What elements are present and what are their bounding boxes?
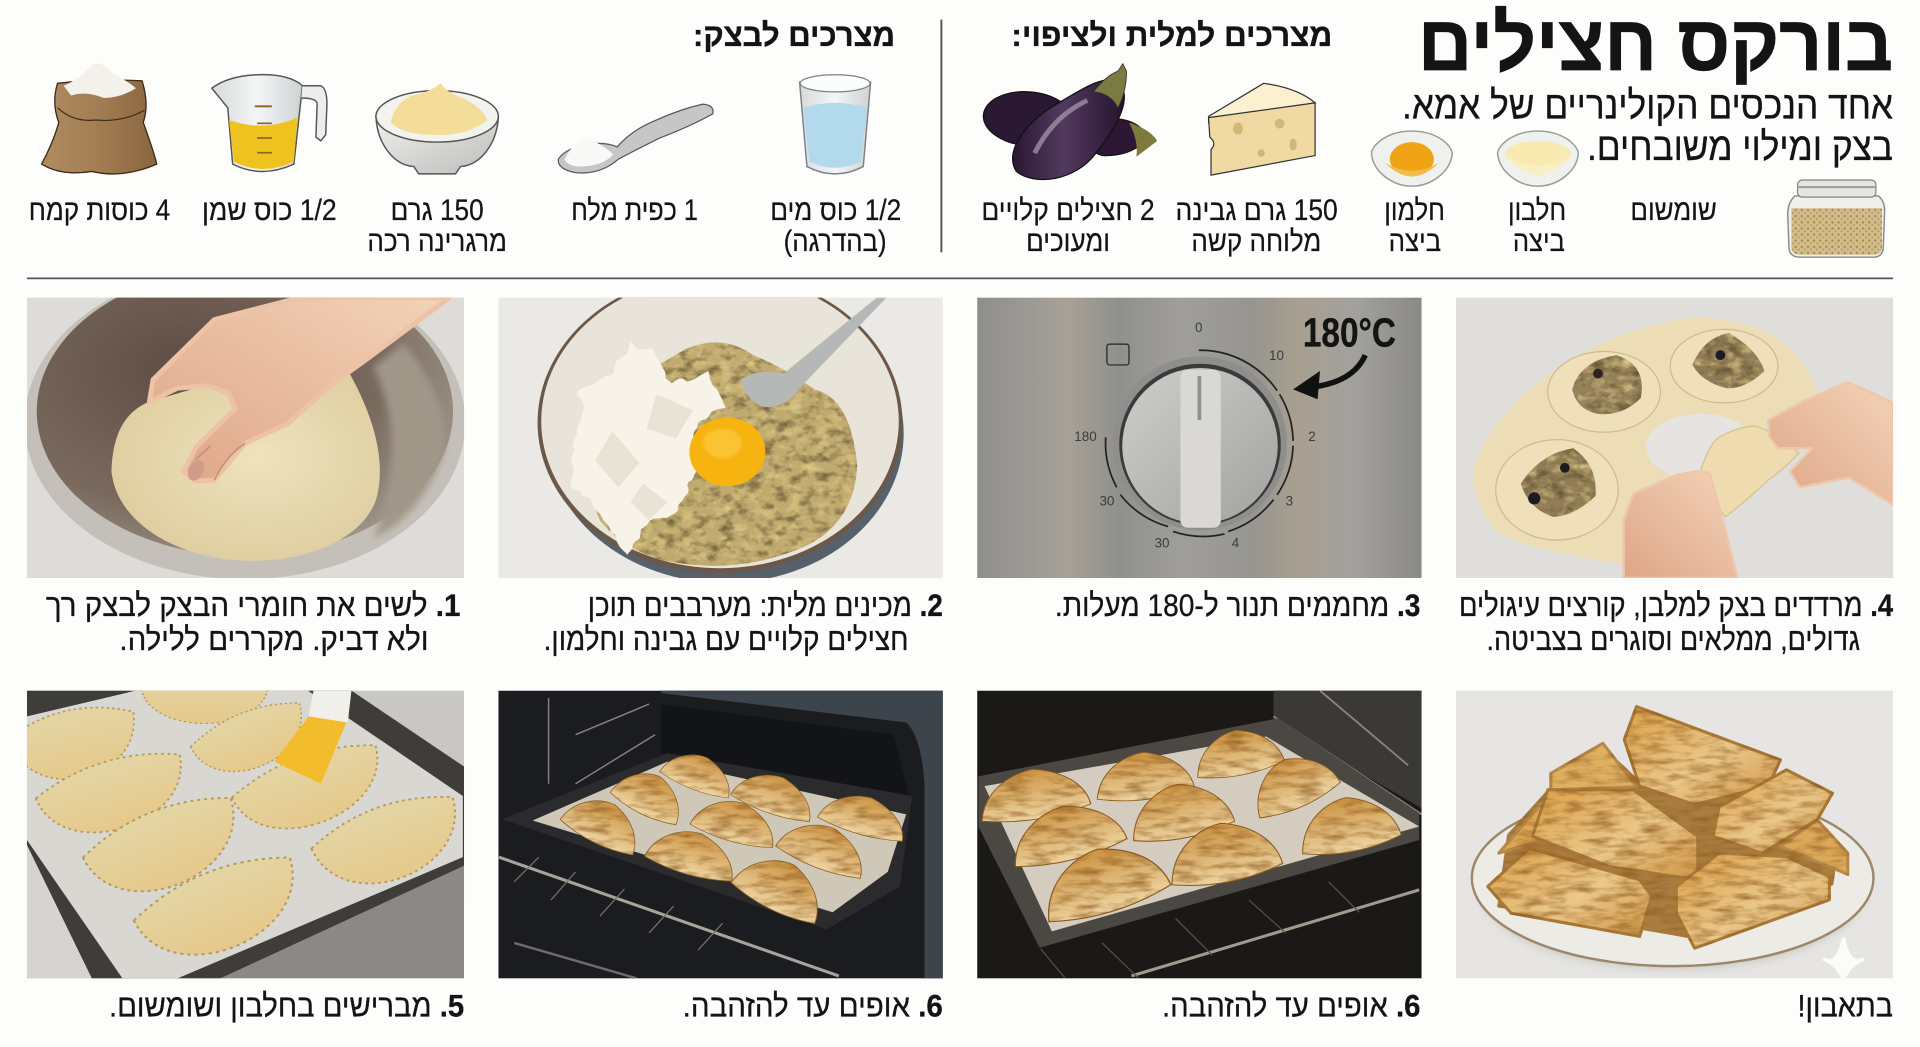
photo 6: baking in oven: [498, 691, 943, 978]
ingredient labels: חלמון: [1384, 194, 1445, 227]
ingredient labels: (בהדרגה): [784, 225, 887, 258]
closing caption: בתאבון!: [1798, 987, 1893, 1023]
caption 4: [1459, 587, 1893, 657]
ingredient labels: 150 גרם גבינה: [1176, 194, 1338, 227]
photo 5: brushing with egg white and sesame: [26, 690, 464, 978]
icon: egg yolk bowl: [1371, 131, 1452, 186]
ingredient labels: חלבון: [1508, 194, 1566, 227]
photo 7: golden borekas in oven: [975, 691, 1422, 978]
ingredient labels: 4 כוסות קמח: [29, 194, 170, 227]
icon: eggplants: [981, 64, 1157, 180]
icon: margarine bowl: [376, 83, 498, 174]
subtitle: [1402, 84, 1893, 169]
ingredient labels: מלוחה קשה: [1191, 225, 1321, 258]
ingredient labels: מרגרינה רכה: [367, 225, 507, 258]
ingredient labels: 2 חצילים קלויים: [981, 194, 1155, 227]
caption 1: [46, 587, 460, 657]
subtitle: בצק ומילוי משובחים.: [1587, 126, 1893, 169]
dial numbers: 4: [1232, 535, 1240, 550]
icon: sesame jar: [1788, 180, 1885, 257]
icon: water glass: [800, 75, 871, 174]
ingredient labels: ומעוכים: [1026, 225, 1110, 258]
dial numbers: 2: [1308, 429, 1316, 444]
photo 8: finished borekas on a plate: [1456, 691, 1893, 980]
photo 3: oven dial at 180°C: [977, 298, 1422, 578]
temperature label: 180°C: [1303, 310, 1396, 356]
caption 1: ולא דביק. מקררים ללילה.: [119, 621, 429, 657]
icon: measuring jug with oil: [212, 75, 327, 171]
dial numbers: 0: [1195, 320, 1203, 335]
dial numbers: 30: [1099, 494, 1114, 509]
oven dial: [1106, 350, 1293, 536]
title: בורקס חצילים: [1418, 0, 1893, 87]
caption 3: 3. מחממים תנור ל-180 מעלות.: [1055, 587, 1420, 623]
caption 4: גדולים, ממלאים וסוגרים בצביטה.: [1487, 621, 1860, 657]
heading: filling ingredients: מצרכים למלית ולציפוי:: [1011, 17, 1332, 53]
ingredient labels: ביצה: [1513, 225, 1565, 258]
caption 4: 4. מרדדים בצק למלבן, קורצים עיגולים: [1459, 587, 1893, 623]
dial numbers: 30: [1155, 535, 1170, 550]
ingredient labels: 1/2 כוס שמן: [202, 194, 337, 227]
caption 6 right: 6. אופים עד להזהבה.: [1162, 987, 1420, 1023]
caption 2: [544, 587, 943, 657]
photo 2: mixing filling: [498, 272, 943, 583]
caption 2: 2. מכינים מלית: מערבבים תוכן: [588, 587, 943, 623]
caption 2: חצילים קלויים עם גבינה וחלמון.: [544, 621, 909, 657]
ingredient labels: 1/2 כוס מים: [770, 194, 901, 227]
icon: spoon with salt: [558, 104, 713, 173]
caption 5: 5. מברישים בחלבון ושומשום.: [109, 987, 464, 1023]
dial numbers: 180: [1074, 429, 1097, 444]
horizontal rule: [27, 278, 1893, 279]
oven icon: [1107, 344, 1129, 365]
divider between ingredient groups: [940, 20, 942, 252]
ingredient labels: 150 גרם: [391, 194, 484, 227]
dial numbers: 3: [1286, 494, 1293, 509]
heading: dough ingredients: מצרכים לבצק:: [693, 17, 895, 53]
icon: flour sack: [42, 63, 157, 174]
caption 6 left: 6. אופים עד להזהבה.: [683, 987, 943, 1023]
ingredient labels: [29, 194, 1717, 258]
dial numbers: 10: [1269, 348, 1284, 363]
caption 1: 1. לשים את חומרי הבצק לבצק רך: [46, 587, 460, 623]
arrow to dial: [1293, 355, 1365, 399]
dial numbers: [1074, 320, 1316, 550]
ingredient labels: שומשום: [1630, 194, 1717, 227]
photo 1: kneading dough: [26, 298, 464, 578]
icon: egg white bowl: [1498, 131, 1578, 186]
photo 4: rolling and sealing dough: [1456, 298, 1893, 578]
icon: cheese wedge: [1209, 83, 1315, 175]
ingredient labels: ביצה: [1389, 225, 1441, 258]
ingredient labels: 1 כפית מלח: [571, 194, 698, 227]
